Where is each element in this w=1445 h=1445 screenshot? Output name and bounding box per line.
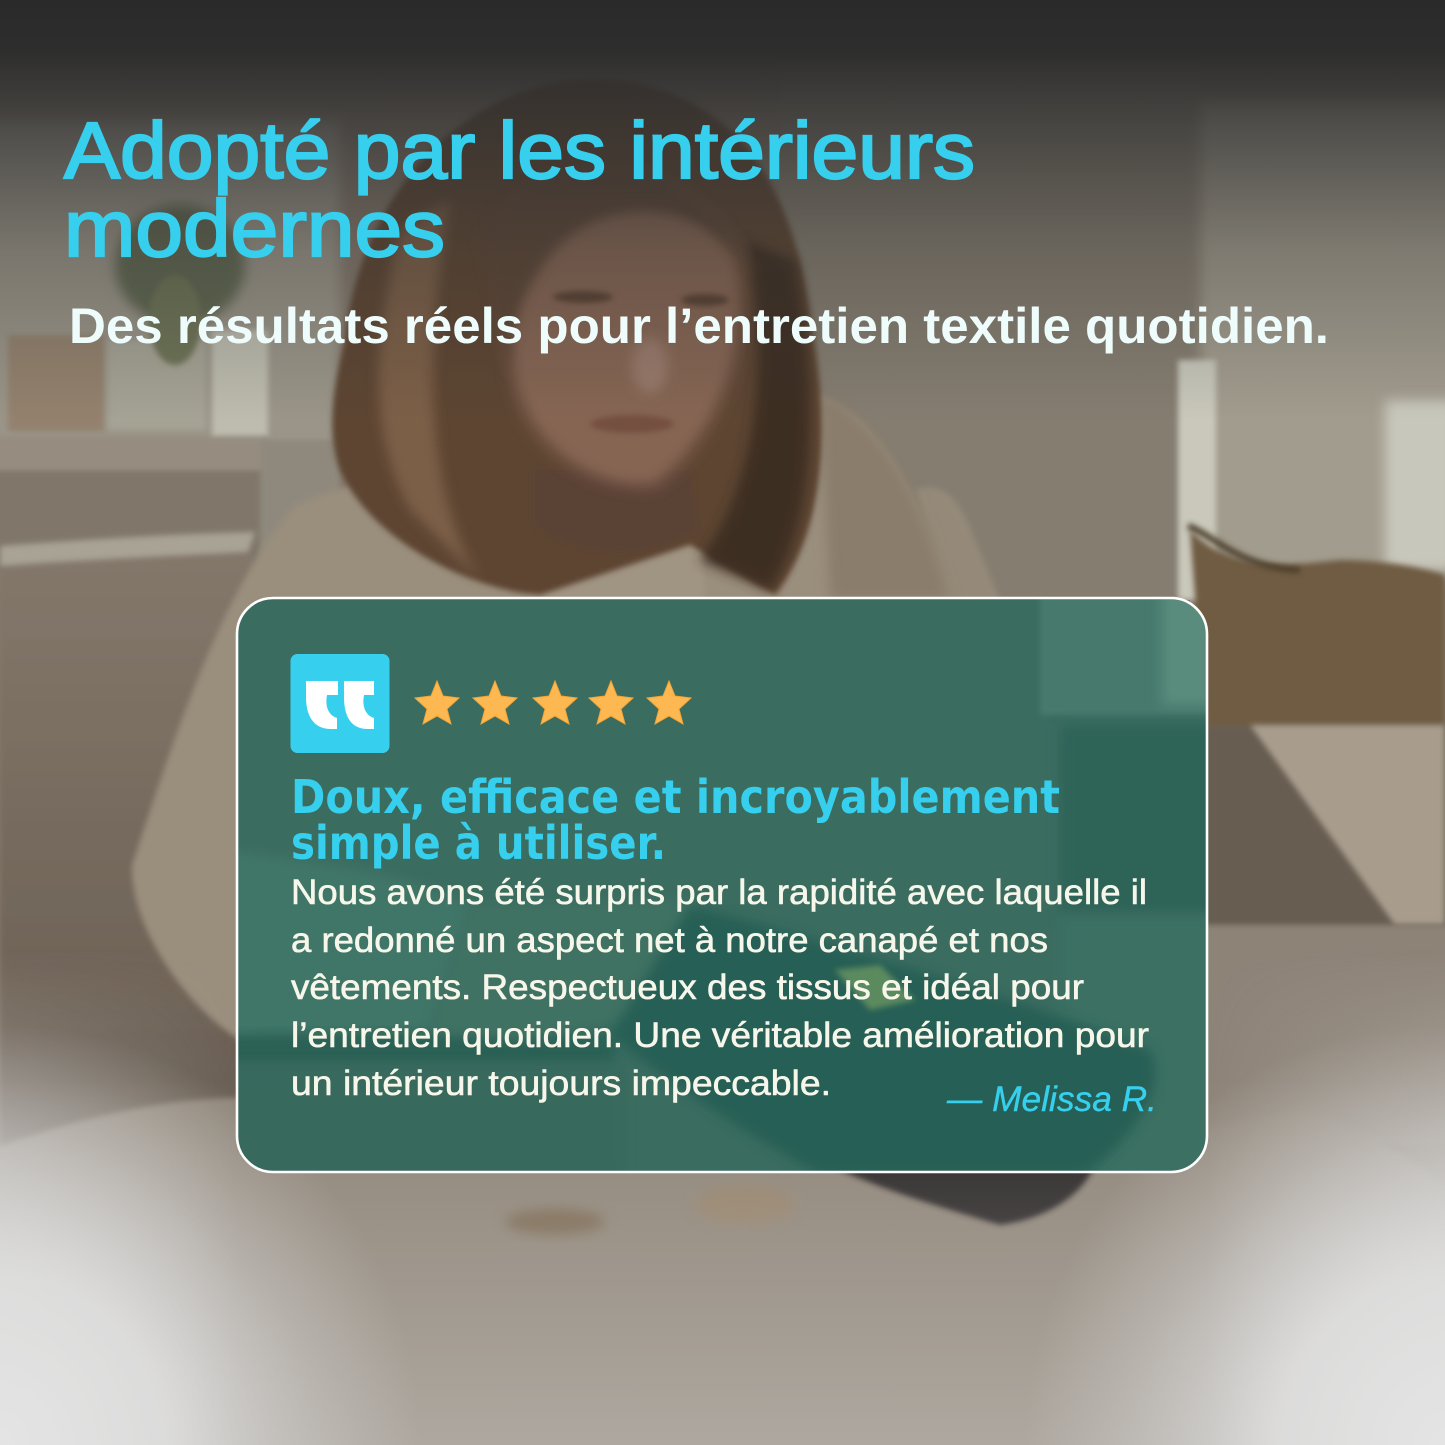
review body text: vêtements. Respectueux des tissus et idéal pour — [291, 968, 1084, 1007]
brush under card — [830, 1165, 1095, 1225]
review body text: a redonné un aspect net à notre canapé et nos — [291, 921, 1048, 960]
hair fringe shadow — [480, 166, 760, 380]
review heading: Doux, efficace et incroyablement — [291, 770, 1060, 824]
nose highlight — [632, 337, 668, 393]
sofa left piping — [0, 532, 255, 566]
neck — [535, 470, 695, 550]
review author: — Melissa R. — [946, 1080, 1157, 1119]
sweater — [132, 395, 1060, 1040]
vignette layers — [0, 1080, 1445, 1445]
review body text — [291, 873, 1149, 1103]
eyes — [553, 291, 613, 303]
window sill — [0, 436, 270, 472]
card backdrop with tinted photo — [225, 590, 1220, 1185]
sofa back right of the woman — [915, 487, 1000, 640]
icon: quotation mark — [290, 654, 390, 753]
tinted dark wall right — [1061, 726, 1206, 912]
subtitle: Des résultats réels pour l’entretien textile quotidien. — [69, 298, 1329, 354]
tinted brush body — [610, 905, 1155, 1175]
title — [64, 106, 975, 273]
white vase left — [108, 340, 206, 430]
review body text: l’entretien quotidien. Une véritable amélioration pour — [291, 1016, 1149, 1055]
tinted window top right — [1040, 600, 1206, 714]
plant pot left — [8, 335, 104, 431]
hair — [332, 80, 822, 595]
sofa left back — [0, 540, 250, 1150]
bright wall and curtain right — [1200, 100, 1445, 580]
lint tufts — [505, 1209, 605, 1235]
review body text: un intérieur toujours impeccable. — [291, 1064, 831, 1103]
sofa right — [1160, 725, 1445, 930]
basket — [1190, 530, 1445, 730]
card border — [237, 598, 1207, 1172]
star rating — [415, 681, 691, 724]
hair dark right — [700, 240, 810, 590]
basket handle — [1188, 526, 1300, 570]
tinted arm — [442, 920, 562, 1040]
tinted lower left sofa — [225, 1065, 625, 1180]
bright window left — [212, 330, 268, 440]
panel: testimonial card — [225, 590, 1220, 1185]
hair highlight — [379, 200, 480, 580]
wall right — [780, 60, 1200, 620]
plant leaves — [115, 205, 245, 325]
title: modernes — [64, 184, 445, 273]
wall left window — [0, 120, 340, 450]
wall behind sofa right — [930, 600, 1190, 730]
title: Adopté par les intérieurs — [64, 106, 975, 195]
sweater collar — [510, 525, 705, 600]
window frame right — [1178, 360, 1216, 600]
sweater shade — [820, 395, 950, 600]
face tone — [507, 188, 739, 483]
face — [496, 169, 749, 493]
tinted sweater sleeve — [238, 857, 460, 1030]
review heading: simple à utiliser. — [291, 816, 666, 870]
sofa seat — [0, 1097, 1445, 1445]
tinted lower band — [225, 1035, 615, 1065]
lips — [590, 415, 674, 433]
review body text: Nous avons été surpris par la rapidité avec laquelle il — [291, 873, 1147, 912]
tinted green brush accent — [835, 965, 915, 1010]
review heading — [291, 770, 1060, 870]
